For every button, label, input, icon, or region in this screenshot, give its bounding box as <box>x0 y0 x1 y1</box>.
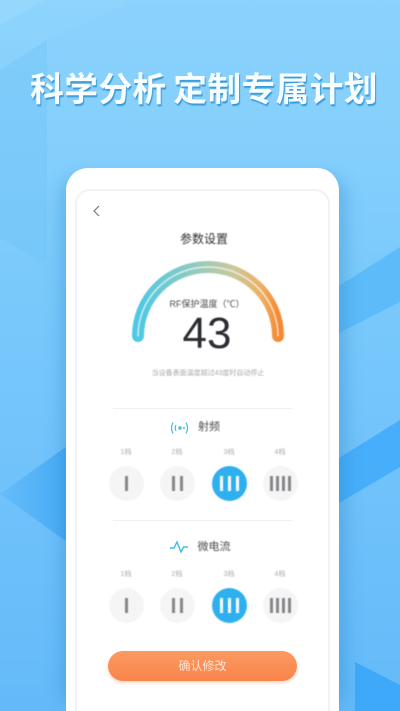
level labels: 1档 <box>121 449 131 456</box>
level 3 button selected <box>212 588 246 622</box>
gauge label: RF保护温度（℃） <box>170 299 244 309</box>
gauge value: 43 <box>183 309 231 358</box>
divider <box>113 408 292 409</box>
gauge arc <box>131 260 285 343</box>
section: radio frequency: 3档 <box>224 449 234 456</box>
section label: 微电流 <box>198 541 230 553</box>
level 2 button <box>160 588 194 622</box>
level 4 button <box>262 588 298 622</box>
level 1 button <box>108 588 144 622</box>
icon: back chevron <box>93 206 100 216</box>
confirm button: 确认修改 <box>178 659 226 673</box>
level 1 button <box>108 466 144 500</box>
section: radio frequency: 4档 <box>275 449 285 456</box>
section label: 射频 <box>198 421 220 433</box>
screen heading: 参数设置 <box>180 232 228 246</box>
inner screen panel <box>75 189 330 711</box>
title: 科学分析 定制专属计划 <box>30 71 378 109</box>
section: radio frequency: 2档 <box>172 449 182 456</box>
level labels: 1档 <box>121 571 131 578</box>
section: micro current: 3档 <box>224 571 234 578</box>
level 3 button selected <box>212 466 246 500</box>
section: radio frequency <box>110 420 298 502</box>
section: micro current: 2档 <box>172 571 182 578</box>
section: micro current: 4档 <box>275 571 285 578</box>
confirm button <box>108 651 297 681</box>
level 4 button <box>262 466 298 500</box>
level 2 button <box>160 466 194 500</box>
icon: radio frequency <box>170 422 188 434</box>
section: micro current <box>110 540 298 624</box>
divider <box>113 520 292 521</box>
icon: pulse wave <box>170 540 188 554</box>
phone mockup panel <box>66 168 339 711</box>
gauge note: 当设备表面温度超过43度时自动停止 <box>152 370 264 377</box>
